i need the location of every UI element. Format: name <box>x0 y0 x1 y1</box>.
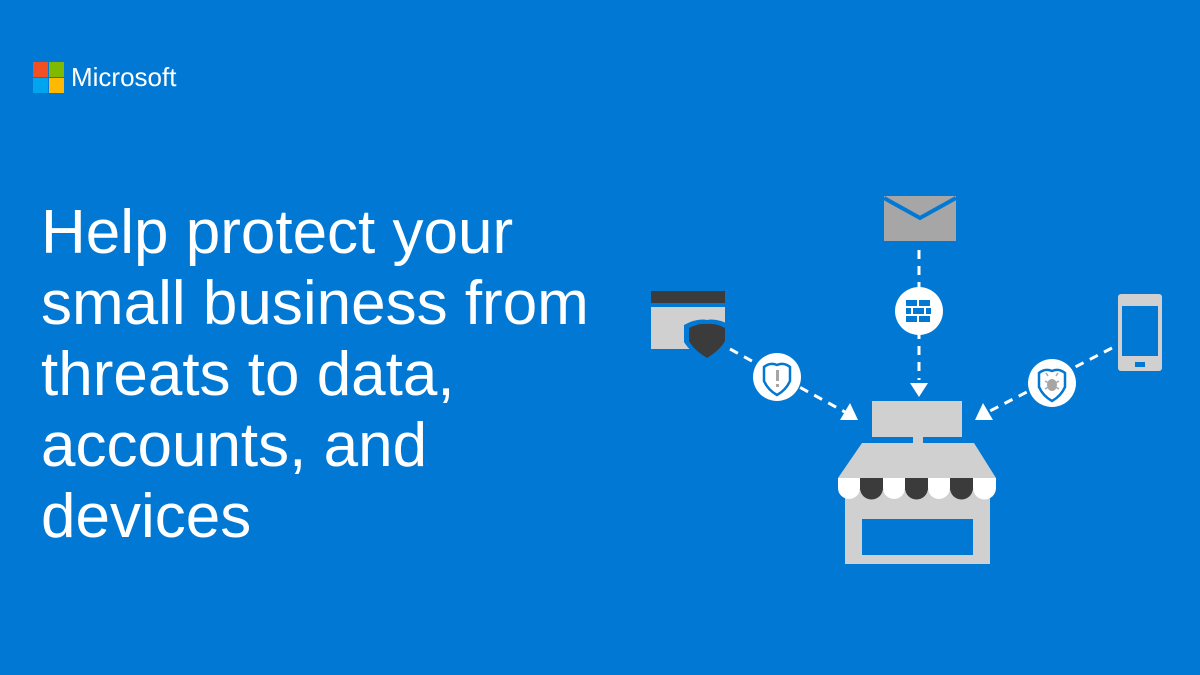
title: small business from <box>41 269 589 338</box>
title: devices <box>41 482 251 551</box>
logo: Microsoft: Microsoft <box>71 62 176 92</box>
icon: firewall circle <box>895 287 943 335</box>
icon: storefront <box>838 401 996 564</box>
title: accounts, and <box>41 411 427 480</box>
title: Help protect your <box>41 198 513 267</box>
arrows <box>730 250 1112 412</box>
icon: alert shield circle <box>753 353 801 401</box>
icon: browser with shield <box>651 291 730 363</box>
icon: bug shield circle <box>1028 359 1076 407</box>
icon: phone <box>1118 294 1162 371</box>
title: threats to data, <box>41 340 455 409</box>
icon: envelope <box>884 196 956 241</box>
title <box>41 198 589 551</box>
